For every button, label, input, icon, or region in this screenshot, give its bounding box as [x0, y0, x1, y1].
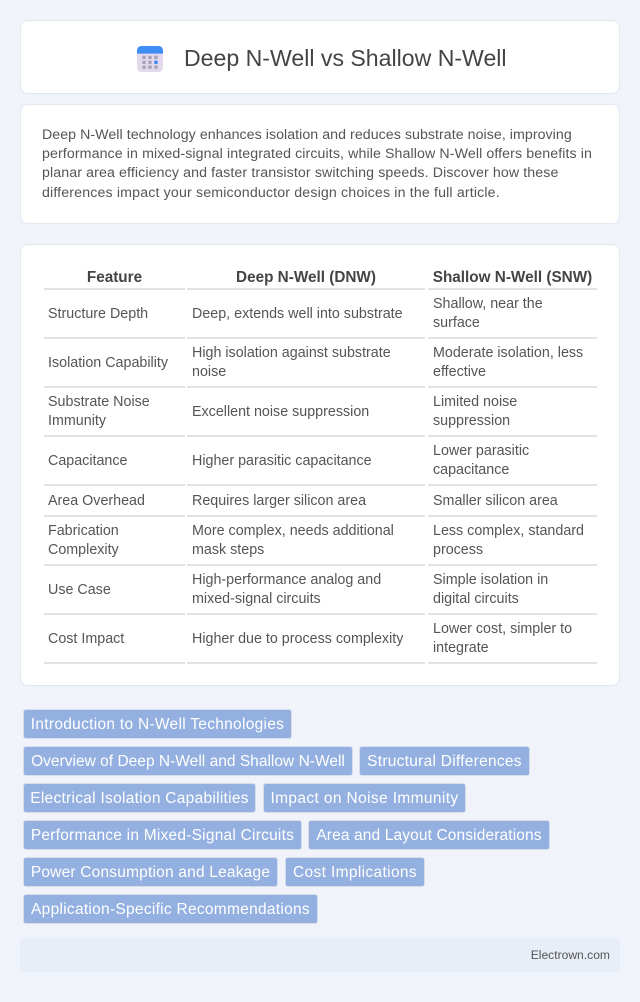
- panel: comparison table: [20, 244, 620, 686]
- comparison table: Lower parasitic: [433, 443, 529, 459]
- comparison table: suppression: [433, 413, 510, 429]
- topic tags: Area and Layout Considerations: [316, 827, 542, 844]
- comparison table: digital circuits: [433, 591, 519, 607]
- comparison table: effective: [433, 364, 486, 380]
- topic tags: Power Consumption and Leakage: [31, 864, 270, 881]
- comparison table: Deep, extends well into substrate: [192, 306, 403, 322]
- intro panel: [20, 104, 620, 224]
- comparison table: High isolation against substrate: [192, 345, 391, 361]
- topic tags: Application-Specific Recommendations: [31, 901, 310, 918]
- topic tags: Cost Implications: [293, 864, 417, 881]
- comparison table: Less complex, standard: [433, 523, 584, 539]
- topic tags: Electrical Isolation Capabilities: [30, 790, 249, 807]
- intro text: differences impact your semiconductor design choices in the full article.: [42, 185, 500, 201]
- intro text: planar area efficiency and faster transistor switching speeds. Discover how these: [42, 165, 558, 181]
- topic tags: Impact on Noise Immunity: [270, 790, 459, 807]
- comparison table: Shallow, near the: [433, 296, 543, 312]
- comparison table: Requires larger silicon area: [192, 493, 366, 509]
- comparison table: Isolation Capability: [48, 355, 168, 371]
- comparison table: mixed-signal circuits: [192, 591, 321, 607]
- title: Deep N-Well vs Shallow N-Well: [184, 45, 507, 71]
- comparison table: noise: [192, 364, 226, 380]
- topic tags: Introduction to N-Well Technologies: [31, 716, 284, 733]
- title card: [20, 20, 620, 94]
- comparison table: Area Overhead: [48, 493, 145, 509]
- comparison table: Smaller silicon area: [433, 493, 558, 509]
- intro text: performance in mixed-signal integrated circuits, while Shallow N-Well offers benefits in: [42, 146, 592, 162]
- comparison table: Structure Depth: [48, 306, 148, 322]
- comparison table: More complex, needs additional: [192, 523, 394, 539]
- comparison table: Shallow N-Well (SNW): [433, 269, 592, 286]
- comparison table: High-performance analog and: [192, 572, 381, 588]
- comparison table: Complexity: [48, 542, 119, 558]
- topic tags: Performance in Mixed-Signal Circuits: [31, 827, 294, 844]
- comparison table: Limited noise: [433, 394, 517, 410]
- comparison table: Simple isolation in: [433, 572, 548, 588]
- comparison table: Substrate Noise: [48, 394, 150, 410]
- comparison table: [44, 269, 597, 664]
- comparison table: integrate: [433, 640, 489, 656]
- topic tags: Structural Differences: [367, 753, 522, 770]
- comparison table: Use Case: [48, 582, 111, 598]
- comparison table: surface: [433, 315, 480, 331]
- comparison table: Fabrication: [48, 523, 119, 539]
- intro text: [42, 126, 592, 201]
- topic tags: [23, 709, 550, 924]
- comparison table: Cost Impact: [48, 631, 124, 647]
- footer: [20, 938, 620, 972]
- comparison table: capacitance: [433, 462, 509, 478]
- comparison table: Lower cost, simpler to: [433, 621, 572, 637]
- comparison table: Deep N-Well (DNW): [236, 269, 376, 286]
- icon: calendar: [137, 46, 163, 72]
- intro text: Deep N-Well technology enhances isolation and reduces substrate noise, improving: [42, 126, 572, 142]
- comparison table: Excellent noise suppression: [192, 404, 369, 420]
- comparison table: process: [433, 542, 483, 558]
- comparison table: Higher parasitic capacitance: [192, 453, 372, 469]
- comparison table: Capacitance: [48, 453, 127, 469]
- comparison table: Feature: [87, 269, 142, 286]
- topic tags: Overview of Deep N-Well and Shallow N-Well: [31, 753, 345, 770]
- footer credit: Electrown.com: [531, 948, 610, 962]
- comparison table: mask steps: [192, 542, 264, 558]
- comparison table: Moderate isolation, less: [433, 345, 583, 361]
- comparison table: Higher due to process complexity: [192, 631, 403, 647]
- comparison table: Immunity: [48, 413, 106, 429]
